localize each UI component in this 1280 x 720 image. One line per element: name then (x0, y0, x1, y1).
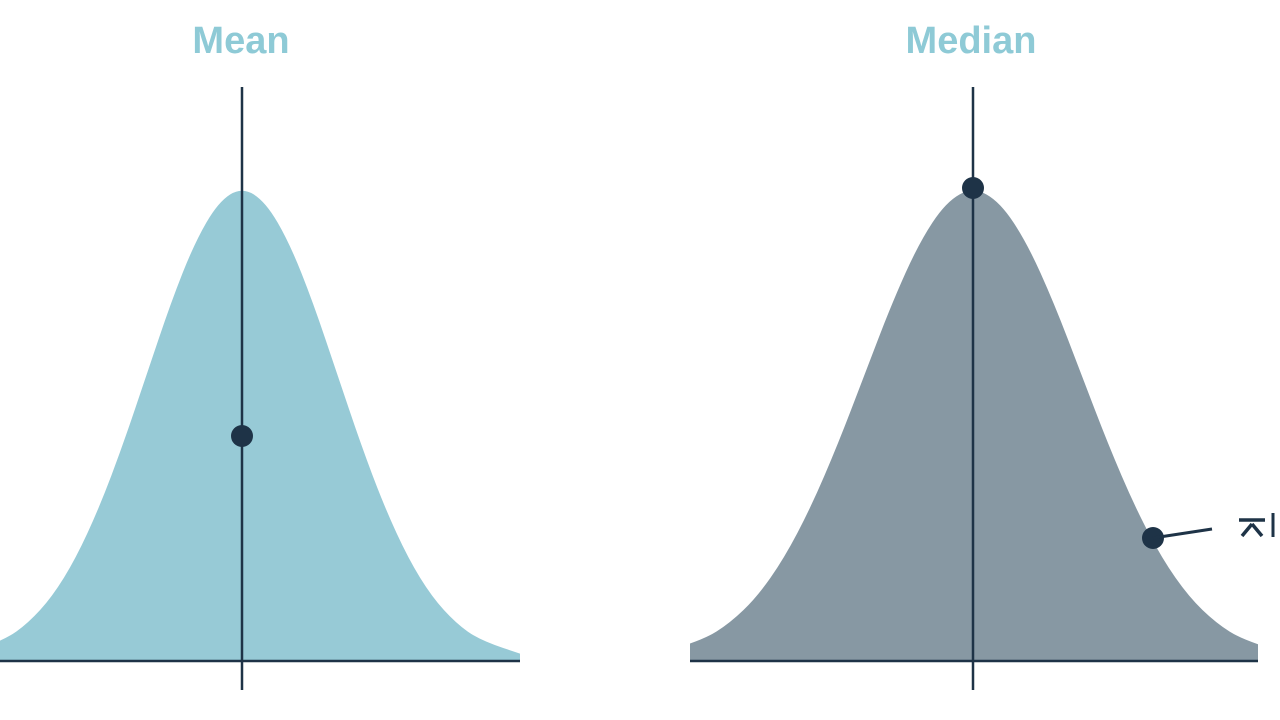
callout: x-bar marker (1142, 513, 1273, 549)
chart: mean distribution (0, 87, 527, 690)
median point (962, 177, 984, 199)
mean point (231, 425, 253, 447)
title: Mean: Mean (192, 20, 290, 62)
chart: median distribution (649, 87, 1280, 690)
title: Median: Median (906, 20, 1036, 62)
